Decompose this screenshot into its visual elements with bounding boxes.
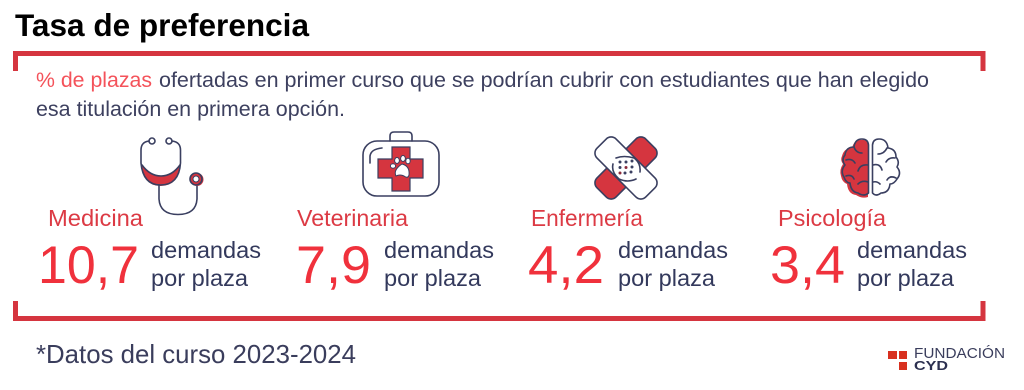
metric: Medicina: Medicina — [48, 205, 144, 231]
icon: brain — [840, 139, 900, 198]
metric: Medicina: 10,7 — [38, 236, 139, 295]
metric: Enfermería: Enfermería — [531, 205, 644, 231]
metric: Veterinaria: Veterinaria — [297, 205, 409, 231]
metric: Medicina: por plaza — [151, 265, 249, 291]
metric: Enfermería: 4,2 — [528, 236, 604, 295]
metric: Psicología: por plaza — [857, 265, 955, 291]
frame: top bracket — [16, 54, 983, 71]
icon: crossed bandages — [592, 134, 660, 202]
metric: Psicología: Psicología — [778, 205, 887, 231]
metric: Psicología: 3,4 — [770, 236, 845, 295]
metric: Medicina: demandas — [151, 237, 261, 263]
logo: Fundación CYD: CYD — [914, 358, 948, 373]
metric: Veterinaria: demandas — [384, 237, 494, 263]
footnote: *Datos del curso 2023-2024 — [36, 341, 356, 369]
metric: Enfermería: por plaza — [618, 265, 716, 291]
intro text: % de plazas — [36, 68, 152, 92]
icon: stethoscope — [141, 138, 204, 214]
intro text — [36, 68, 929, 121]
frame: bottom bracket — [16, 301, 983, 318]
title: Tasa de preferencia — [15, 8, 310, 43]
metric: Enfermería — [528, 205, 728, 295]
metric: Psicología: demandas — [857, 237, 967, 263]
metric: Enfermería: demandas — [618, 237, 728, 263]
intro text: esa titulación en primera opción. — [36, 97, 345, 121]
metric: Medicina — [38, 205, 261, 295]
logo: Fundación CYD: FUNDACIÓN — [914, 345, 1005, 362]
intro text: ofertadas en primer curso que se podrían cubrir con estudiantes que han elegido — [159, 68, 929, 92]
metric: Psicología — [770, 205, 967, 295]
metric: Veterinaria: 7,9 — [296, 236, 371, 295]
metric: Veterinaria — [296, 205, 494, 295]
icon: veterinary first aid kit — [363, 132, 439, 196]
metric: Veterinaria: por plaza — [384, 265, 482, 291]
logo: Fundación CYD — [888, 345, 1005, 373]
